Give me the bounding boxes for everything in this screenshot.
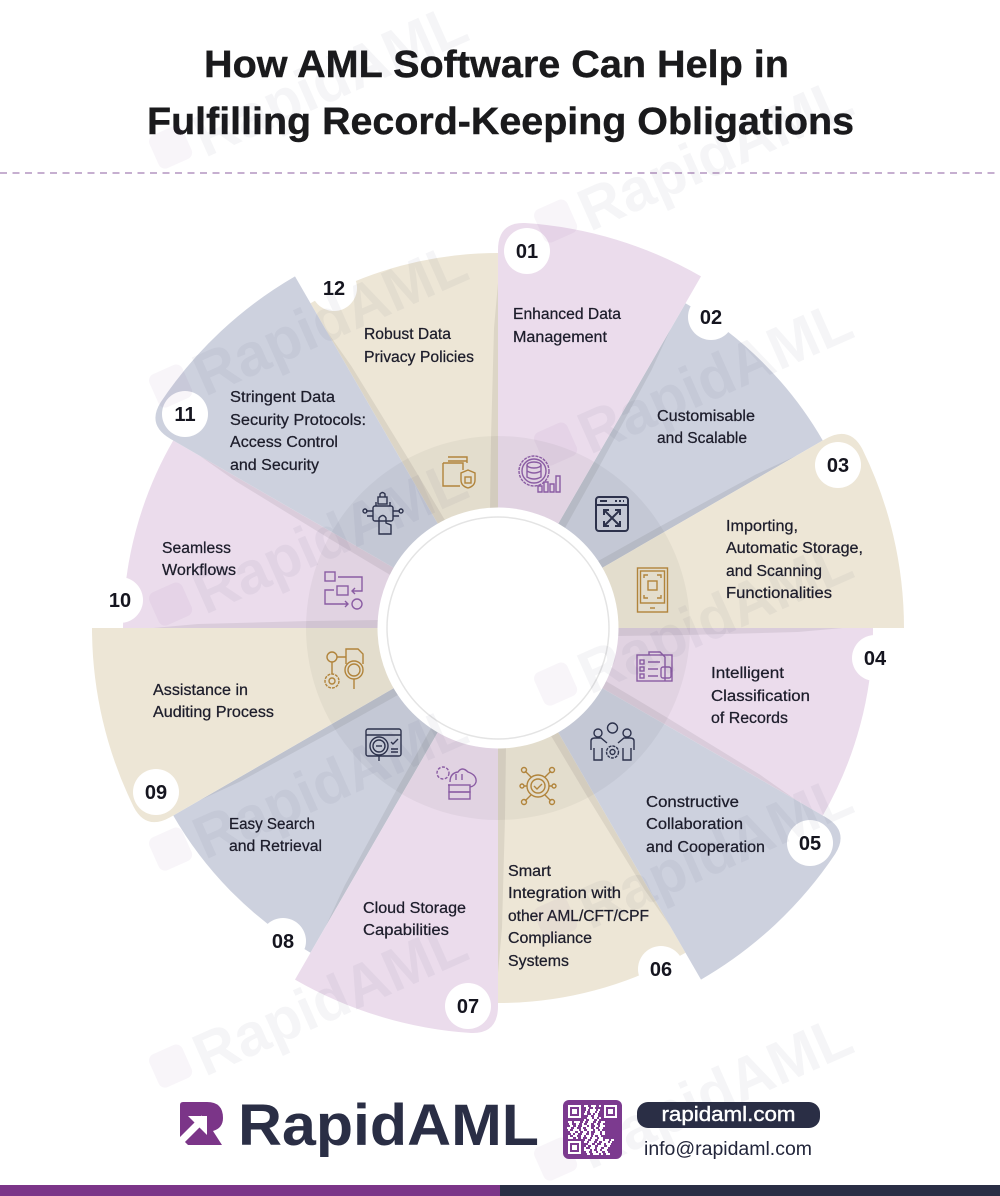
badge 05	[787, 820, 833, 866]
badge 04: 04	[864, 648, 887, 670]
label 11: Security Protocols:	[230, 412, 366, 429]
label 05	[646, 794, 765, 856]
badge 01: 01	[516, 241, 538, 263]
badge 05: 05	[799, 833, 821, 855]
icon: tablet scan	[638, 568, 668, 612]
watermarks: RapidAML	[568, 287, 862, 467]
label 06: Smart	[508, 863, 552, 880]
label 06: Compliance	[508, 930, 592, 947]
watermarks	[142, 0, 862, 1196]
badge 07	[445, 983, 491, 1029]
sector 04	[498, 628, 898, 816]
label 11: and Security	[230, 457, 319, 474]
footer bar	[0, 1185, 1000, 1196]
sector 01	[498, 223, 701, 628]
badge 08	[260, 918, 306, 964]
badge 12	[311, 265, 357, 311]
label 03: Automatic Storage,	[726, 540, 863, 557]
badge 08: 08	[272, 931, 294, 953]
icon: workflow	[325, 572, 362, 609]
label 01: Enhanced Data	[513, 306, 621, 323]
sector 05	[396, 628, 849, 1006]
label 11	[230, 389, 366, 474]
badge 09: 09	[145, 782, 167, 804]
label 04: of Records	[711, 710, 788, 727]
badge 06: 06	[650, 959, 672, 981]
label 07: Cloud Storage	[363, 900, 466, 917]
email: info@rapidaml.com	[644, 1139, 812, 1160]
label 09	[153, 682, 274, 721]
label 08: and Retrieval	[229, 838, 322, 855]
badge 09	[133, 769, 179, 815]
sector 07	[295, 628, 498, 1033]
badge 10: 10	[109, 590, 131, 612]
sector 08	[148, 534, 498, 964]
watermarks: RapidAML	[568, 64, 862, 244]
logo icon	[176, 1102, 223, 1148]
icon: access fingerprint	[363, 492, 403, 534]
sector 12	[310, 209, 660, 628]
label 04: Classification	[711, 688, 810, 705]
label 05: and Cooperation	[646, 839, 765, 856]
logo wordmark: RapidAML	[238, 1093, 539, 1158]
label 05: Constructive	[646, 794, 739, 811]
label 11: Access Control	[230, 434, 338, 451]
icon: cloud storage	[437, 767, 476, 799]
badge 11	[162, 391, 208, 437]
label 03: Importing,	[726, 518, 798, 535]
label 11: Stringent Data	[230, 389, 335, 406]
label 03: and Scanning	[726, 563, 822, 580]
label 05: Collaboration	[646, 816, 743, 833]
sector 09	[46, 452, 498, 831]
watermarks: RapidAML	[183, 692, 477, 872]
icon: data gear	[519, 456, 560, 492]
sector 11	[147, 250, 599, 628]
badge 02	[688, 294, 734, 340]
watermarks: RapidAML	[183, 447, 477, 627]
watermarks: RapidAML	[568, 762, 862, 942]
label 10: Workflows	[162, 562, 236, 579]
centre circle	[378, 508, 618, 748]
watermarks: RapidAML	[568, 1002, 862, 1182]
icon: locked folder	[443, 457, 475, 488]
label 01	[513, 306, 621, 346]
badge 02: 02	[700, 307, 722, 329]
website pill	[637, 1102, 820, 1128]
sector 10	[97, 440, 498, 628]
icon: audit search	[325, 649, 363, 689]
label 03: Functionalities	[726, 585, 832, 602]
label 10: Seamless	[162, 540, 231, 557]
icon: integration badge	[520, 768, 556, 804]
title: How AML Software Can Help in	[204, 44, 789, 86]
label 06	[508, 863, 649, 970]
label 06: other AML/CFT/CPF	[508, 908, 649, 925]
icon: expand window	[596, 497, 628, 531]
label 02	[657, 408, 755, 447]
sector 02	[498, 294, 848, 722]
sector 03	[498, 425, 950, 804]
icon: search window	[366, 729, 401, 761]
label 02: and Scalable	[657, 430, 747, 447]
website pill: rapidaml.com	[662, 1104, 796, 1126]
badge 07: 07	[457, 996, 479, 1018]
label 01: Management	[513, 329, 608, 346]
label 08	[229, 816, 322, 855]
label 02: Customisable	[657, 408, 755, 425]
watermarks: RapidAML	[568, 527, 862, 707]
label 07	[363, 900, 466, 939]
label 12	[364, 326, 474, 366]
title: Fulfilling Record-Keeping Obligations	[147, 101, 854, 143]
badge 01	[504, 228, 550, 274]
icon: classified records	[637, 652, 672, 681]
badge 11: 11	[174, 404, 196, 426]
label 09: Assistance in	[153, 682, 248, 699]
label 09: Auditing Process	[153, 704, 274, 721]
label 07: Capabilities	[363, 922, 449, 939]
badge 03	[815, 442, 861, 488]
badge 03: 03	[827, 455, 849, 477]
label 12: Privacy Policies	[364, 349, 474, 366]
inner shaded band	[306, 436, 690, 820]
sector 06	[336, 628, 686, 1047]
title	[147, 44, 854, 143]
watermarks: RapidAML	[183, 229, 477, 409]
badge 06	[638, 946, 684, 992]
label 04	[711, 665, 810, 727]
label 06: Integration with	[508, 885, 621, 902]
label 03	[726, 518, 863, 602]
icon: collaboration team	[591, 723, 634, 760]
badge 12: 12	[323, 278, 345, 300]
badge 10	[97, 577, 143, 623]
label 06: Systems	[508, 953, 569, 970]
badge 04	[852, 635, 898, 681]
label 08: Easy Search	[229, 816, 315, 833]
label 10	[162, 540, 236, 579]
QR code	[563, 1100, 622, 1159]
label 04: Intelligent	[711, 665, 785, 682]
watermarks: RapidAML	[183, 909, 477, 1089]
label 12: Robust Data	[364, 326, 451, 343]
